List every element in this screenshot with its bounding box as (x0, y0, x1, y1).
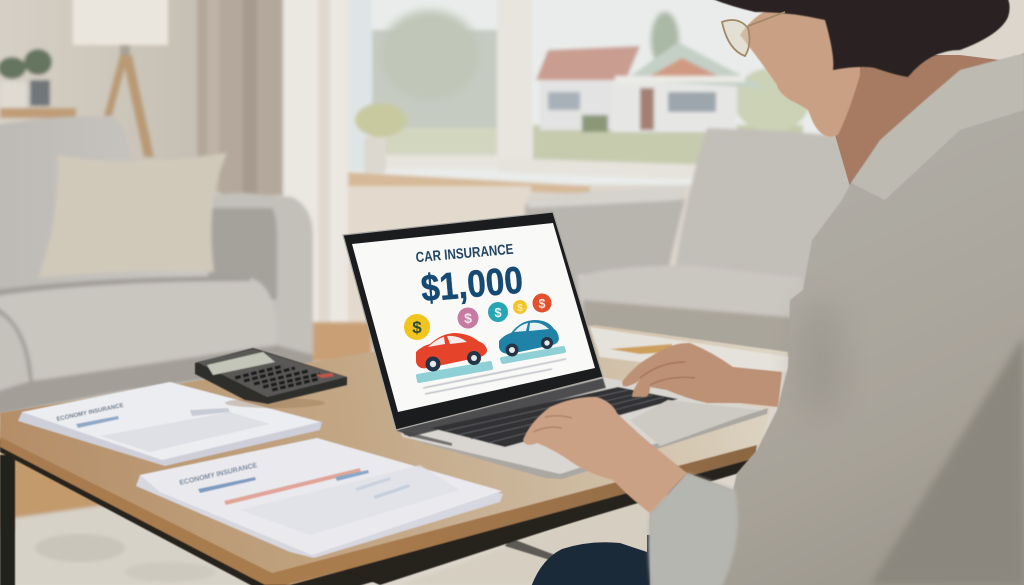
paper stack: front (136, 438, 503, 558)
laptop screen (352, 223, 595, 412)
coin: teal (488, 302, 508, 322)
trousers (530, 535, 665, 585)
laptop lid (343, 212, 603, 430)
notebook and pencil (590, 327, 790, 372)
neck (815, 55, 1000, 190)
coin: red: $ (539, 297, 546, 311)
far hand (622, 343, 782, 407)
window plant (355, 103, 407, 173)
paper stack: front: ECONOMY INSURANCE (179, 462, 258, 487)
screen heading: CAR INSURANCE (415, 242, 514, 266)
laptop base (396, 377, 768, 479)
curtains (197, 0, 348, 325)
calculator (195, 348, 347, 408)
table frame (0, 440, 760, 585)
lamp and shelf (0, 0, 168, 157)
near hand (523, 397, 687, 513)
coin: red (532, 294, 552, 312)
coin: small yellow (513, 300, 527, 314)
table top (0, 325, 788, 585)
face (740, 0, 860, 137)
coin: yellow (404, 314, 430, 340)
laptop (343, 212, 768, 479)
sofa cushion (38, 153, 227, 278)
screen fine print (423, 359, 566, 394)
hair (703, 0, 1010, 77)
coin: small yellow: $ (517, 303, 523, 314)
near sleeve cuff (648, 473, 738, 585)
window view (345, 0, 825, 185)
window frame (345, 0, 805, 184)
coin: yellow: $ (412, 318, 422, 337)
paper stack: back left: ECONOMY INSURANCE (56, 403, 124, 423)
shirt shading (796, 300, 1024, 585)
red car (416, 333, 491, 381)
coin: teal: $ (494, 305, 502, 320)
collar (851, 55, 1024, 200)
coin: pink (458, 308, 478, 328)
floor (0, 322, 372, 530)
glasses (722, 12, 785, 56)
rug (14, 490, 660, 585)
window sill and wall (346, 172, 590, 326)
coin: pink: $ (464, 310, 472, 326)
shirt body (650, 50, 1024, 585)
person (523, 0, 1024, 585)
screen amount: $1,000 (419, 260, 525, 310)
blue car (499, 320, 564, 362)
table (0, 325, 788, 585)
paper stack: back left (18, 382, 322, 466)
right sofa (525, 128, 880, 356)
left sofa (0, 116, 313, 415)
